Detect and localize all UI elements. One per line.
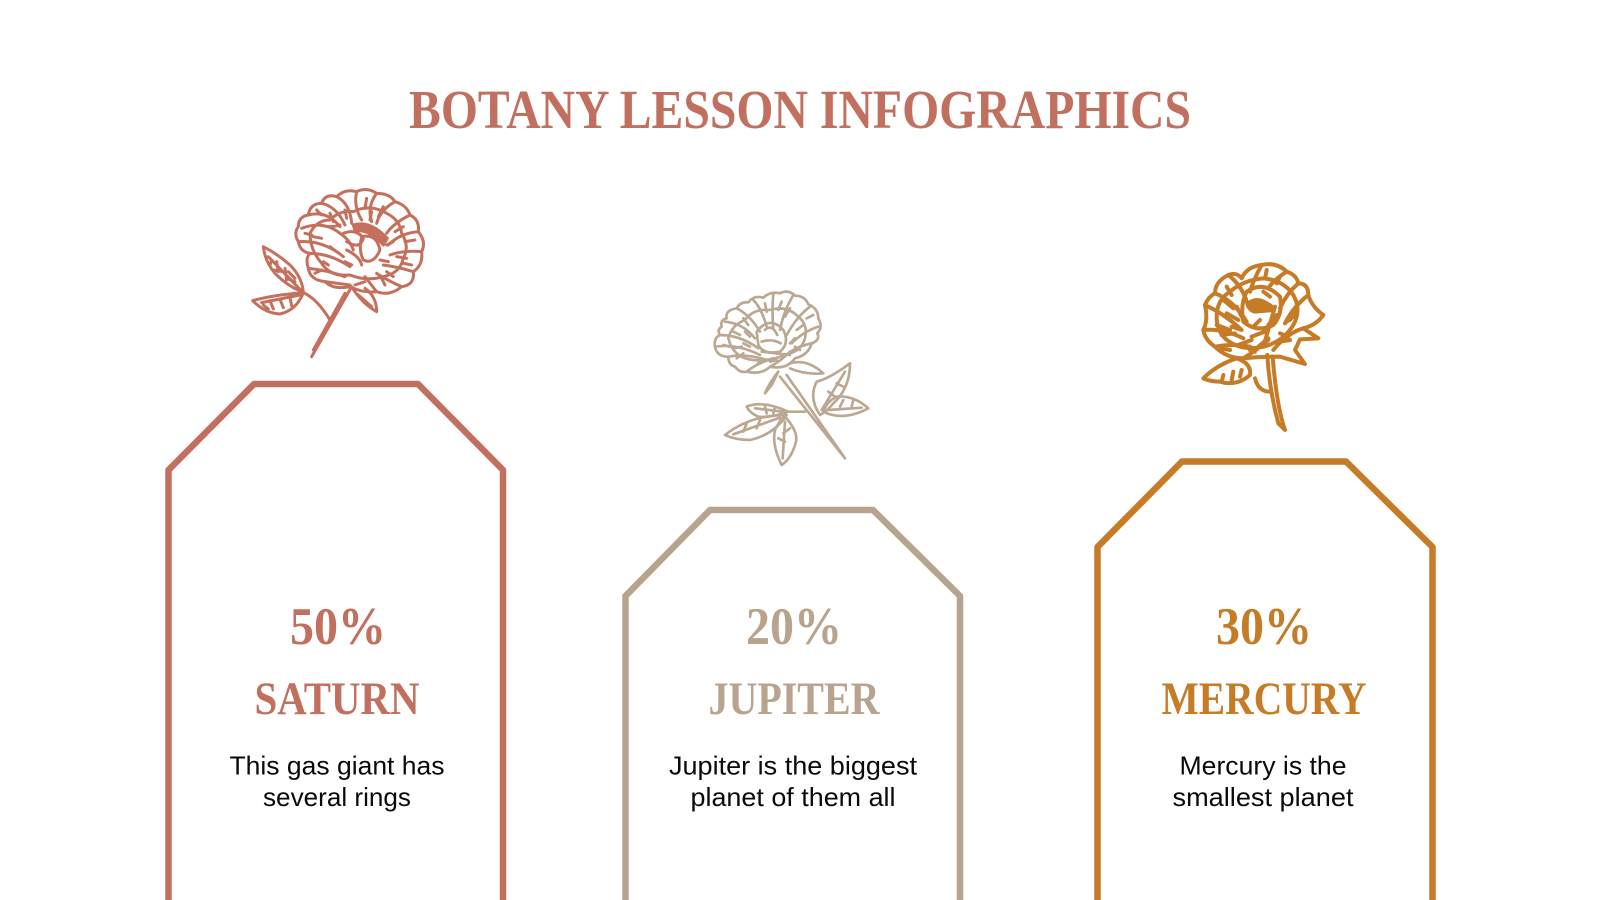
panel: Jupiter — [626, 510, 960, 900]
percentage: Saturn: 50% — [290, 598, 386, 656]
description: Jupiter: Jupiter is the biggest — [669, 750, 918, 780]
panel outline: Mercury — [1098, 462, 1432, 900]
percentage: Mercury: 30% — [1216, 598, 1312, 656]
description: Mercury: smallest planet — [1172, 782, 1354, 812]
title: BOTANY LESSON INFOGRAPHICS — [409, 79, 1191, 140]
panel: Mercury — [1098, 462, 1432, 900]
description: Saturn: This gas giant has — [230, 750, 444, 780]
description: Mercury: Mercury is the — [1180, 750, 1346, 780]
icon: rose peony flower — [253, 190, 424, 357]
name: Saturn: SATURN — [254, 673, 420, 725]
icon: tan peony flower — [715, 292, 868, 465]
description: Jupiter: planet of them all — [690, 782, 896, 812]
panel outline: Jupiter — [626, 510, 960, 900]
panel outline: Saturn — [168, 384, 503, 900]
name: Jupiter: JUPITER — [708, 673, 880, 725]
percentage: Jupiter: 20% — [746, 598, 842, 656]
panel: Saturn — [168, 384, 503, 900]
icon: orange peony flower — [1203, 264, 1323, 430]
description: Saturn: several rings — [263, 782, 411, 812]
name: Mercury: MERCURY — [1162, 673, 1367, 725]
